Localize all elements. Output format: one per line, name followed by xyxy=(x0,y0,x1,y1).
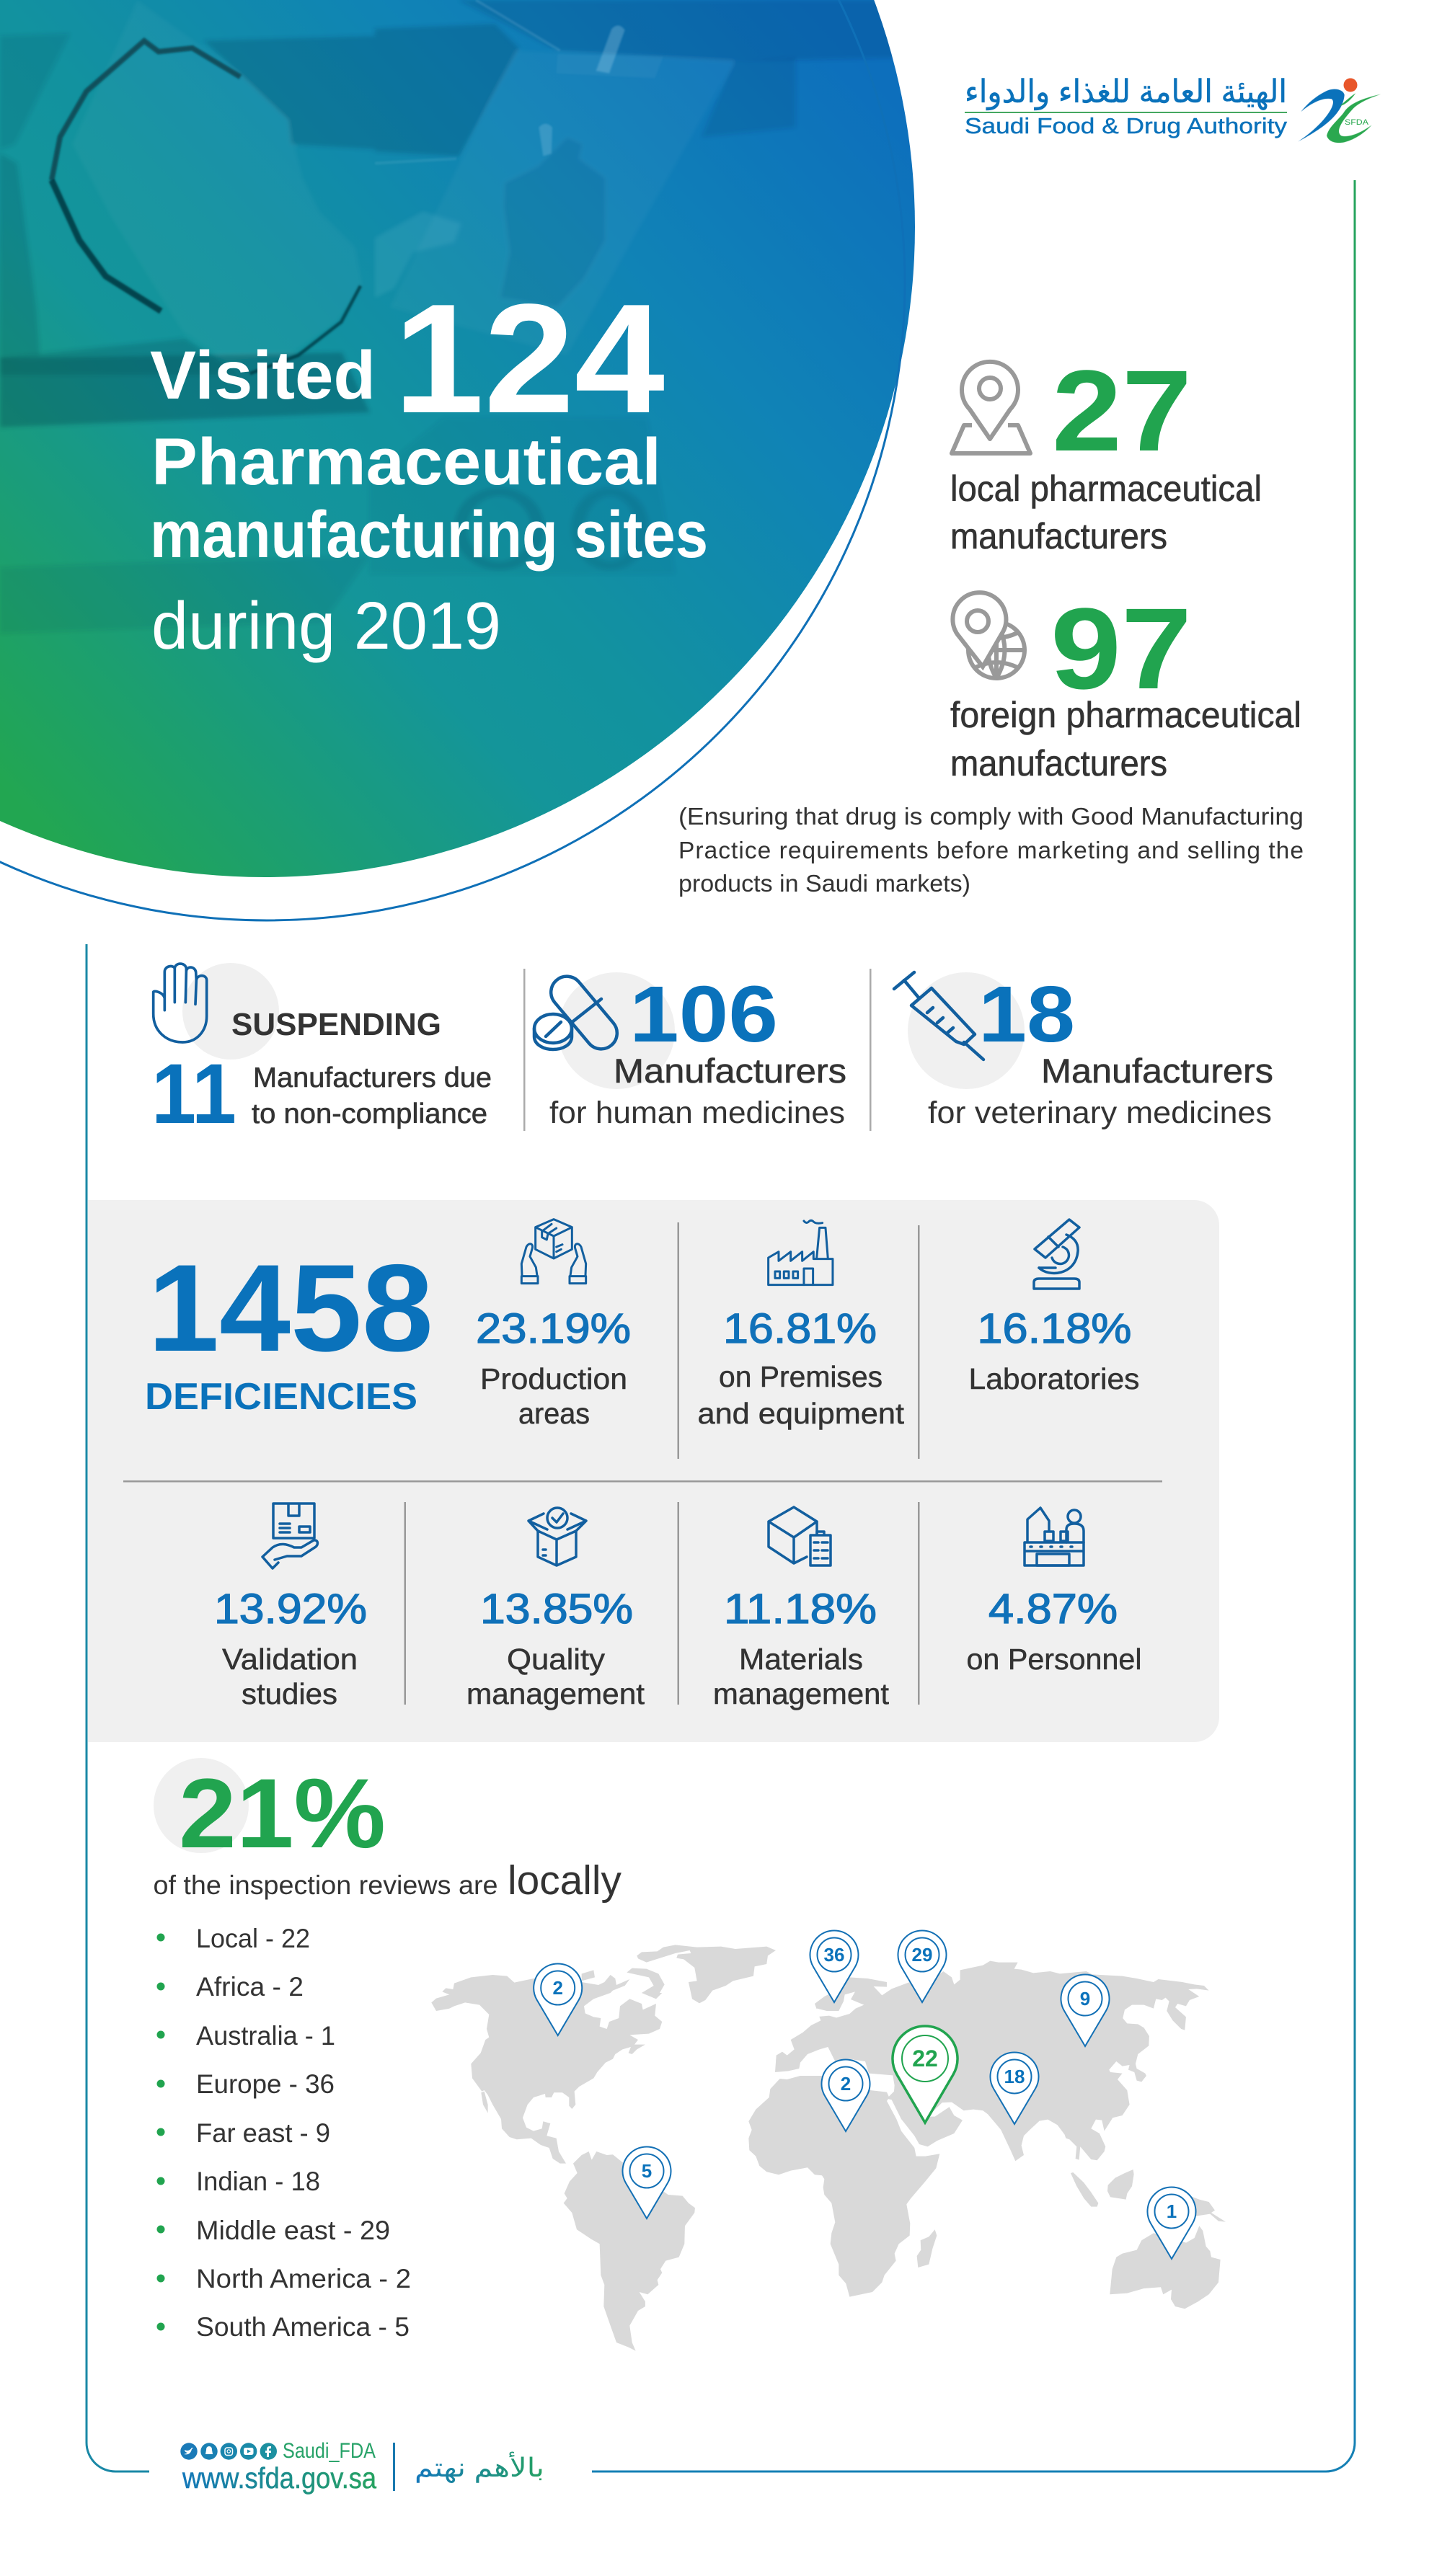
hero heading: Visited xyxy=(150,337,376,414)
stat: local manufacturers: 27 xyxy=(1052,346,1192,475)
pin: Far East 9: 9 xyxy=(1080,1988,1090,2009)
list: regions: South America - 5 xyxy=(196,2312,410,2342)
note text block xyxy=(678,804,1304,897)
pin: Europe 36 xyxy=(810,1931,858,2002)
icon: map pin xyxy=(952,362,1030,453)
footer: بالأهم نهتم xyxy=(415,2451,544,2483)
footer: www.sfda.gov.sa xyxy=(182,2461,376,2495)
item: personnel: on Personnel xyxy=(966,1643,1142,1676)
frame line: right xyxy=(592,180,1355,2471)
logo: Saudi Food & Drug Authority: SFDA xyxy=(1345,118,1369,127)
item: validation studies xyxy=(214,1504,367,1710)
pin: Middle East 29: 29 xyxy=(912,1944,932,1966)
list: regions: North America - 2 xyxy=(196,2264,411,2293)
list: regions: Africa - 2 xyxy=(196,1972,304,2002)
list: regions: Australia - 1 xyxy=(196,2021,335,2051)
stat: foreign manufacturers: 97 xyxy=(1050,584,1192,713)
item: production areas: 23.19% xyxy=(476,1305,631,1352)
hero heading: during 2019 xyxy=(151,588,501,663)
hero photo disc with gradient overlay xyxy=(0,0,930,887)
note text block: Practice requirements before marketing and selling the xyxy=(678,838,1304,864)
pin: Indian 18 xyxy=(991,2053,1038,2124)
panel: deficiencies xyxy=(88,1200,1219,1742)
item: personnel: 4.87% xyxy=(988,1586,1118,1633)
pin: North America 2 xyxy=(534,1964,582,2035)
item: materials management: management xyxy=(713,1677,890,1710)
thin blue arc around hero disc xyxy=(0,0,905,920)
icon: globe pin xyxy=(952,592,1025,678)
item: personnel xyxy=(966,1508,1142,1676)
panel: veterinary medicines xyxy=(894,970,1273,1130)
hero heading: manufacturing sites xyxy=(150,498,708,572)
item: premises and equipment: and equipment xyxy=(698,1397,905,1430)
panel: suspending: SUSPENDING xyxy=(231,1007,441,1042)
panel: human medicines: for human medicines xyxy=(549,1096,845,1130)
list: regions xyxy=(157,1924,411,2342)
item: quality management: management xyxy=(466,1677,645,1710)
total deficiencies: DEFICIENCIES xyxy=(145,1376,417,1418)
item: laboratories: Laboratories xyxy=(969,1362,1139,1395)
list: regions: Middle east - 29 xyxy=(196,2216,390,2245)
stat: 21% local inspections xyxy=(153,1758,622,1904)
total deficiencies: 1458 xyxy=(148,1239,433,1377)
pin: Local 22 xyxy=(893,2026,957,2123)
panel: veterinary medicines: 18 xyxy=(978,970,1075,1059)
item: laboratories xyxy=(969,1220,1139,1395)
stat: foreign manufacturers: foreign pharmaceutical xyxy=(950,695,1301,735)
pin: Australia 1: 1 xyxy=(1167,2200,1177,2222)
stat: local manufacturers: local pharmaceutical xyxy=(950,468,1262,509)
item: production areas: Production xyxy=(480,1362,627,1395)
world map xyxy=(431,1931,1226,2351)
footer: Saudi_FDA xyxy=(283,2439,376,2463)
panel: veterinary medicines: for veterinary medicines xyxy=(928,1096,1272,1130)
panel: human medicines xyxy=(534,970,846,1130)
social icons xyxy=(180,2443,277,2460)
stat: 21% local inspections: 21% xyxy=(179,1759,386,1869)
pin: Local 22: 22 xyxy=(912,2046,938,2071)
panel: veterinary medicines: Manufacturers xyxy=(1041,1052,1273,1090)
hero heading xyxy=(150,271,708,663)
panel: suspending: Manufacturers due xyxy=(253,1062,492,1093)
list: regions: Indian - 18 xyxy=(196,2167,320,2196)
item: materials management: 11.18% xyxy=(724,1586,877,1633)
item: materials management xyxy=(713,1507,890,1710)
stat: foreign manufacturers xyxy=(950,584,1301,783)
item: premises and equipment xyxy=(698,1220,905,1430)
hero heading: 124 xyxy=(394,271,665,445)
map pins xyxy=(534,1931,1195,2259)
item: premises and equipment: 16.81% xyxy=(723,1305,877,1352)
stat: foreign manufacturers: manufacturers xyxy=(950,743,1167,783)
icon: hand xyxy=(154,964,207,1042)
panel: human medicines: 106 xyxy=(629,970,778,1059)
pin: Far East 9 xyxy=(1061,1975,1109,2046)
item: production areas xyxy=(476,1220,631,1430)
logo: Saudi Food & Drug Authority: الهيئة العامة للغذاء والدواء xyxy=(965,74,1287,110)
panel: suspending: 11 xyxy=(151,1047,236,1142)
item: validation studies: studies xyxy=(242,1677,337,1710)
item: quality management: Quality xyxy=(507,1643,606,1676)
pin: Europe 36: 36 xyxy=(824,1944,844,1966)
pin: South America 5: 5 xyxy=(642,2160,652,2182)
pin: Africa 2 xyxy=(822,2060,870,2131)
stat: 21% local inspections: of the inspection reviews are xyxy=(153,1870,497,1900)
item: quality management: 13.85% xyxy=(480,1586,633,1633)
note text block: (Ensuring that drug is comply with Good Manufacturing xyxy=(678,804,1304,830)
footer xyxy=(180,2439,544,2495)
frame line: left xyxy=(87,944,149,2471)
pin: Australia 1 xyxy=(1148,2188,1195,2259)
hero heading: Pharmaceutical xyxy=(151,425,661,499)
stat: local manufacturers: manufacturers xyxy=(950,516,1167,556)
stat: 21% local inspections: locally xyxy=(508,1857,622,1904)
pin: Indian 18: 18 xyxy=(1004,2066,1025,2087)
item: materials management: Materials xyxy=(739,1643,863,1676)
panel: suspending: to non-compliance xyxy=(252,1098,487,1129)
pin: South America 5 xyxy=(623,2147,671,2219)
item: validation studies: 13.92% xyxy=(214,1586,367,1633)
list: regions: Local - 22 xyxy=(196,1924,310,1953)
item: laboratories: 16.18% xyxy=(977,1305,1131,1352)
item: validation studies: Validation xyxy=(222,1643,358,1676)
pin: North America 2: 2 xyxy=(552,1977,563,1999)
item: premises and equipment: on Premises xyxy=(719,1360,883,1393)
panel: suspending xyxy=(151,963,492,1142)
icon: syringe xyxy=(894,972,983,1060)
logo: Saudi Food & Drug Authority xyxy=(965,74,1381,143)
list: regions: Far east - 9 xyxy=(196,2118,330,2148)
item: quality management xyxy=(466,1508,645,1710)
pin: Middle East 29 xyxy=(898,1931,946,2002)
list: regions: Europe - 36 xyxy=(196,2069,335,2099)
stat: local manufacturers xyxy=(950,346,1262,556)
panel: human medicines: Manufacturers xyxy=(614,1052,846,1090)
icon: pills xyxy=(534,970,624,1055)
pin: Africa 2: 2 xyxy=(841,2073,851,2095)
note text block: products in Saudi markets) xyxy=(678,871,970,897)
item: production areas: areas xyxy=(518,1397,590,1430)
logo: Saudi Food & Drug Authority: Saudi Food & Drug Authority xyxy=(965,113,1288,138)
